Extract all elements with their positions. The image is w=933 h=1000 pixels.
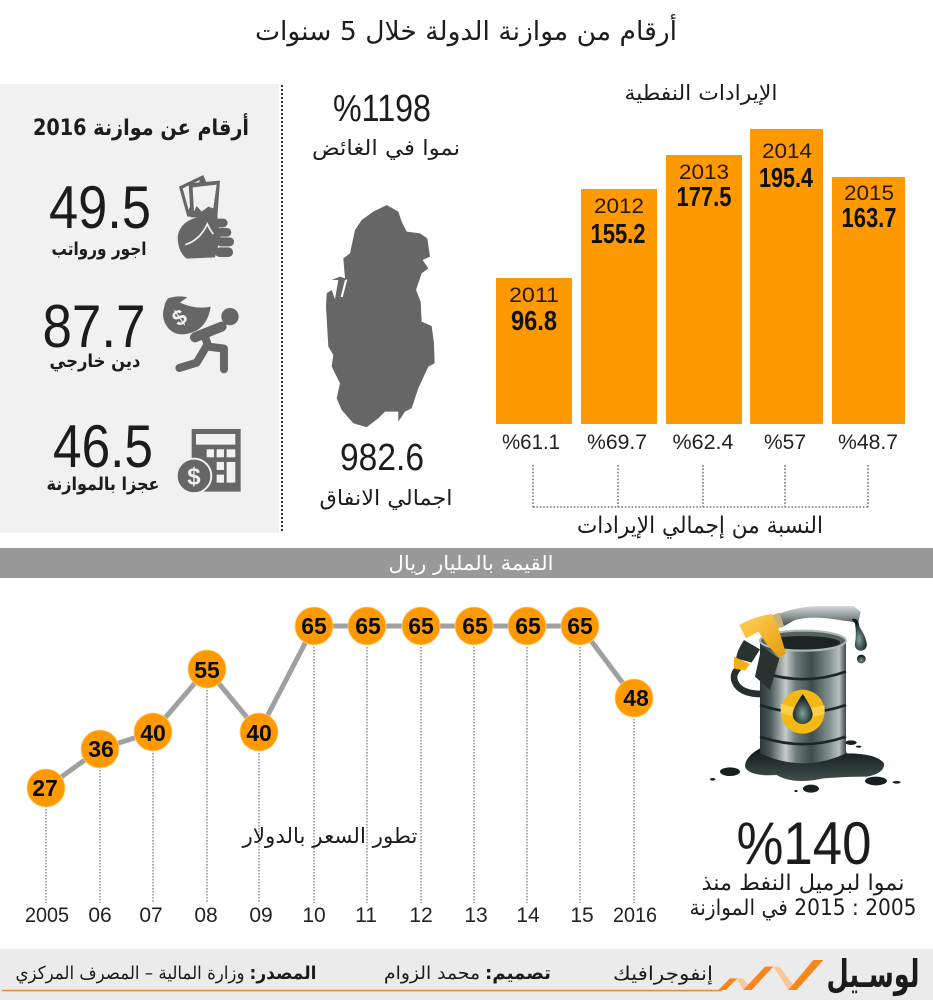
label: wages: اجور ورواتب	[52, 239, 146, 260]
designer: تصميم:	[485, 963, 551, 984]
label: budget deficit: عجزا بالموازنة	[46, 474, 160, 495]
bar 2013	[666, 155, 742, 424]
year axis labels: 15	[570, 904, 594, 927]
stat: barrel growth: %140	[736, 810, 872, 877]
panel: 2016 budget figures	[0, 84, 279, 533]
data points: 65	[355, 613, 381, 639]
source: المصدر:	[250, 963, 316, 984]
percentages of total revenue: %69.7	[587, 431, 647, 454]
data points: 40	[246, 720, 272, 746]
data points: 27	[32, 775, 58, 801]
icon: man carrying debt bag: $	[167, 304, 192, 331]
data points: 36	[88, 736, 114, 762]
data points: 65	[515, 613, 541, 639]
bar 2014: 2014	[762, 140, 812, 163]
year axis labels: 07	[139, 904, 163, 927]
data points: 55	[194, 657, 220, 683]
designer: محمد الزوام	[384, 963, 480, 984]
year axis labels: 10	[302, 904, 326, 927]
percentages of total revenue: %48.7	[838, 431, 898, 454]
icon: oil barrel with fuel nozzle	[710, 606, 901, 793]
stat: barrel growth: 2005 : 2015 في الموازنة	[690, 896, 916, 921]
label: foreign debt: دين خارجي	[50, 351, 140, 372]
banner: value in billion riyals	[0, 548, 933, 578]
bar 2011: 96.8	[511, 305, 557, 336]
bar 2015: 163.7	[842, 202, 896, 233]
bar 2014	[750, 129, 823, 424]
year axis labels: 11	[355, 904, 377, 927]
stat: surplus growth: نموا في الغائض	[312, 136, 460, 160]
stat: surplus growth	[312, 88, 460, 160]
year axis labels	[25, 904, 657, 927]
bar 2014: 195.4	[759, 162, 813, 193]
caption: share of total revenue: النسبة من إجمالي الإيرادات	[577, 513, 823, 539]
stat: barrel growth	[690, 810, 916, 921]
year axis labels: 09	[249, 904, 273, 927]
logo mark	[718, 960, 823, 990]
bar 2011: 2011	[509, 284, 559, 307]
map: Qatar	[326, 205, 435, 427]
designer	[384, 963, 551, 984]
data points: 65	[301, 613, 327, 639]
bar 2013: 177.5	[676, 181, 732, 212]
data points	[27, 607, 653, 807]
icon: hand holding money	[178, 175, 234, 259]
data points: 40	[140, 720, 166, 746]
source: وزارة المالية – المصرف المركزي	[16, 963, 244, 984]
value: budget deficit: 46.5	[53, 413, 153, 480]
chart caption: تطور السعر بالدولار	[241, 824, 418, 848]
stat: total spending: 982.6	[340, 437, 424, 479]
infographic label: إنفوجرافيك	[613, 963, 713, 986]
percentages of total revenue: %57	[764, 431, 806, 454]
year axis labels: 06	[88, 904, 112, 927]
data points: 48	[623, 685, 649, 711]
percentages of total revenue: %62.4	[672, 431, 734, 454]
chart heading: oil revenues: الإيرادات النفطية	[624, 81, 778, 105]
year axis labels: 2005	[25, 904, 69, 927]
bar 2012: 2012	[594, 195, 644, 218]
bar 2015	[832, 177, 905, 424]
value: wages: 49.5	[49, 174, 151, 241]
banner: value in billion riyals: القيمة بالمليار ريال	[388, 551, 554, 575]
bar 2012: 155.2	[590, 218, 646, 249]
icon: calculator with coin	[177, 429, 241, 493]
icon: calculator with coin: $	[187, 463, 201, 490]
bar 2012	[581, 189, 657, 424]
percentages of total revenue	[502, 431, 898, 454]
bar 2013: 2013	[679, 161, 729, 184]
panel heading: أرقام عن موازنة 2016	[33, 112, 249, 141]
bar 2011	[496, 278, 572, 424]
bar 2015: 2015	[844, 182, 894, 205]
line chart: oil price in dollars	[25, 607, 657, 927]
value: foreign debt: 87.7	[42, 293, 146, 360]
data points: 65	[567, 613, 593, 639]
title: أرقام من موازنة الدولة خلال 5 سنوات	[255, 13, 677, 47]
year axis labels: 14	[516, 904, 540, 927]
icon: man carrying debt bag	[163, 296, 239, 369]
footer	[0, 949, 933, 1000]
stat: total spending: اجمالي الانفاق	[320, 486, 452, 510]
stat: total spending	[320, 437, 452, 510]
year axis labels: 2016	[613, 904, 657, 927]
year axis labels: 12	[409, 904, 433, 927]
data points: 65	[462, 613, 488, 639]
year axis labels: 08	[194, 904, 218, 927]
year axis labels: 13	[464, 904, 488, 927]
percentages of total revenue: %61.1	[502, 431, 560, 454]
bar chart: oil revenues	[496, 129, 905, 424]
stat: surplus growth: %1198	[333, 88, 431, 130]
stat: barrel growth: نموا لبرميل النفط منذ	[702, 871, 904, 896]
data points: 65	[408, 613, 434, 639]
